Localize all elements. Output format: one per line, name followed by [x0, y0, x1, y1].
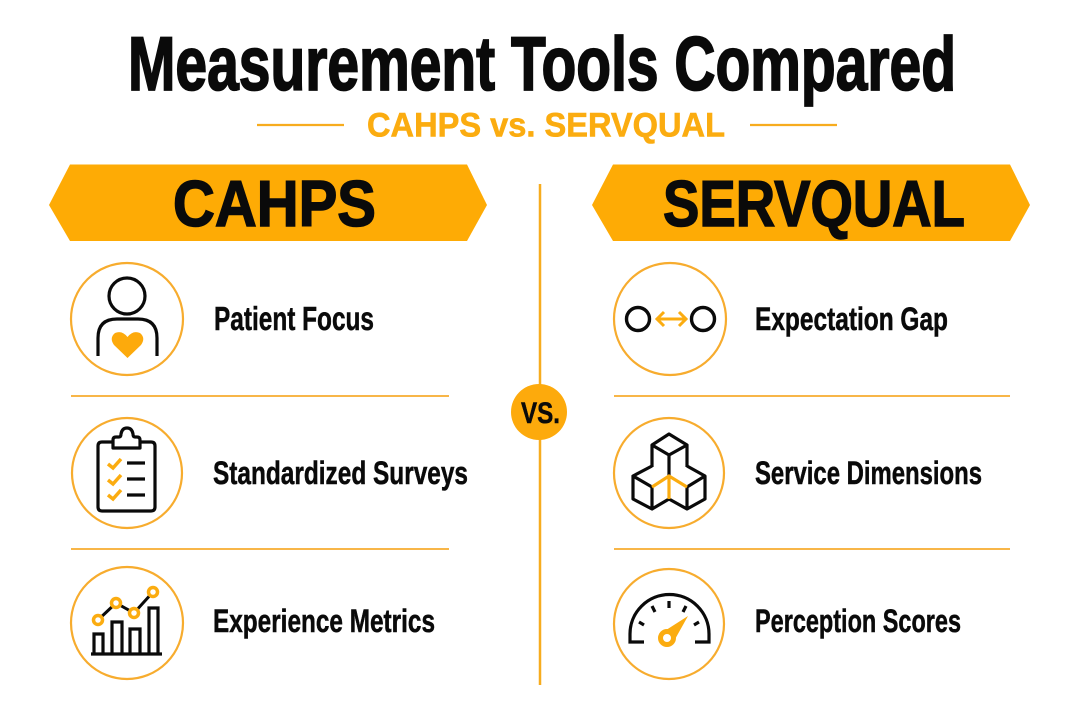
icon: stacked cubes [633, 434, 705, 509]
banner: CAHPS: CAHPS [173, 167, 376, 240]
icon: clipboard checklist [98, 428, 155, 511]
banner: CAHPS [49, 164, 487, 241]
vs badge [511, 384, 567, 440]
item: Perception Scores [614, 569, 961, 679]
item: Service Dimensions [614, 418, 982, 528]
panel: SERVQUAL [592, 164, 1030, 679]
item: Expectation Gap [614, 263, 948, 375]
item: Patient Focus [71, 263, 374, 375]
vs badge: VS. [521, 397, 560, 430]
item: Perception Scores: Perception Scores [755, 603, 961, 639]
item: Service Dimensions: Service Dimensions [755, 455, 982, 491]
item: Standardized Surveys: Standardized Surveys [213, 455, 468, 491]
item: Experience Metrics [71, 567, 435, 679]
panel: CAHPS [49, 164, 487, 679]
icon: two circles with arrow [626, 308, 714, 330]
center divider line [539, 184, 541, 685]
subtitle: CAHPS vs. SERVQUAL [367, 106, 725, 144]
banner: SERVQUAL: SERVQUAL [663, 167, 965, 240]
item: Standardized Surveys [72, 418, 468, 528]
icon: gauge [630, 594, 709, 644]
item: Patient Focus: Patient Focus [214, 300, 374, 337]
item: Experience Metrics: Experience Metrics [213, 603, 435, 639]
item: Expectation Gap: Expectation Gap [755, 301, 948, 337]
icon: bar and line chart [91, 588, 162, 654]
icon: person with heart [98, 278, 157, 358]
